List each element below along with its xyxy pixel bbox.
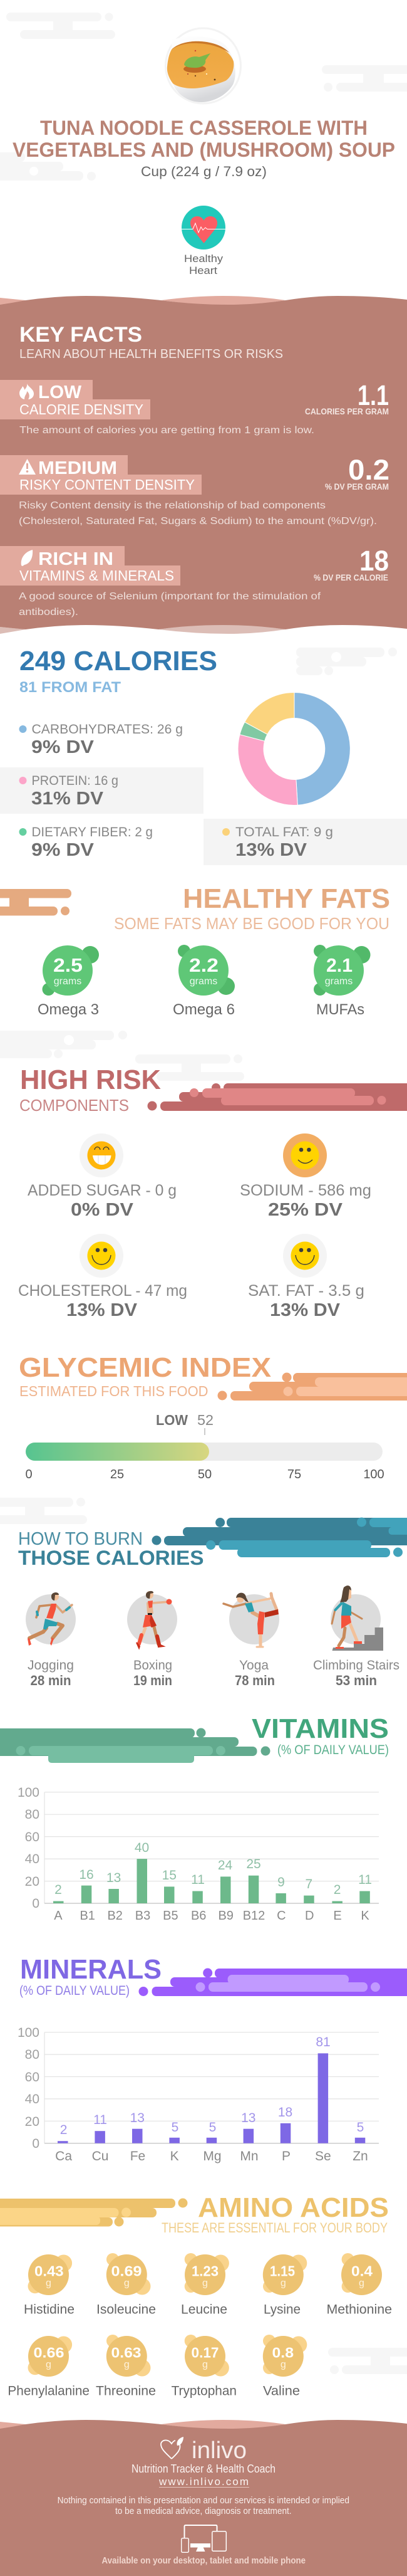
bar chart: vitamins: E	[333, 1909, 342, 1923]
subheading: percent of daily value: (% OF DAILY VALUE)	[277, 1743, 389, 1757]
logo: inlivo	[161, 2437, 247, 2464]
macro: carbohydrates: CARBOHYDRATES: 26 g	[31, 722, 183, 737]
background clouds: header	[0, 13, 407, 181]
activity: climbing stairs	[313, 1585, 399, 1688]
decoration: burn stripes	[152, 1517, 407, 1557]
disclaimer	[58, 2495, 349, 2516]
amino: phenylalanine: Phenylalanine	[8, 2384, 90, 2399]
activity: jogging: 28 min	[30, 1673, 71, 1688]
fact: medium risky content density: 0.2	[348, 454, 389, 486]
bar chart: minerals: 100	[18, 2026, 39, 2040]
bar chart: minerals: 0	[32, 2137, 39, 2151]
risk: saturated fat: 13% DV	[270, 1300, 341, 1320]
bar chart: vitamins: 11	[358, 1873, 372, 1887]
bar chart: minerals: 13	[241, 2111, 255, 2125]
fact: medium risky content density: MEDIUM	[38, 458, 117, 478]
fat: omega 6: grams	[190, 976, 217, 987]
fat: omega 3	[38, 945, 99, 1018]
bar chart: minerals: Mg	[203, 2149, 222, 2163]
serving size: Cup (224 g / 7.9 oz)	[141, 164, 267, 179]
decoration: minerals stripes	[139, 1969, 407, 1996]
heading: those calories: THOSE CALORIES	[18, 1547, 204, 1569]
bar chart: minerals: Fe	[130, 2149, 145, 2163]
amino: isoleucine: Isoleucine	[96, 2303, 156, 2317]
macro: total fat: TOTAL FAT: 9 g	[235, 825, 333, 839]
risk: added sugar: 0% DV	[71, 1200, 134, 1220]
amino: tryptophan	[172, 2335, 237, 2399]
amino: isoleucine: 0.69	[111, 2263, 142, 2279]
macro: dietary fiber: DIETARY FIBER: 2 g	[31, 825, 153, 839]
disclaimer: Nothing contained in this presentation and our services is intended or implied	[58, 2495, 349, 2506]
risk: cholesterol: 13% DV	[66, 1300, 138, 1320]
heading: glycemic index: GLYCEMIC INDEX	[19, 1352, 271, 1383]
fact: medium risky content density: RISKY CONTENT DENSITY	[19, 476, 195, 493]
gi scale	[25, 1468, 384, 1481]
availability note: Available on your desktop, tablet and mobile phone	[101, 2555, 306, 2566]
bar chart: vitamins: 11	[191, 1873, 205, 1887]
fact: rich in vitamins and minerals: antibodies).	[19, 607, 78, 618]
panel: glycemic index	[19, 1352, 407, 1481]
icon: devices	[182, 2525, 226, 2552]
bar chart: vitamins: 24	[218, 1858, 232, 1873]
macro: protein	[0, 767, 204, 814]
bar chart: minerals: 60	[25, 2070, 39, 2084]
activity: boxing	[127, 1591, 177, 1688]
panel: how to burn those calories	[18, 1517, 407, 1688]
macro: dietary fiber: 9% DV	[31, 840, 95, 860]
gi scale: 50	[198, 1468, 212, 1481]
heading: 249 calories: 249 CALORIES	[19, 646, 217, 676]
bar chart: vitamins: B12	[243, 1909, 265, 1923]
amino: leucine	[181, 2253, 229, 2317]
macro: dietary fiber	[19, 825, 153, 860]
panel: minerals	[18, 1954, 407, 2163]
bar chart: minerals: 13	[130, 2111, 145, 2125]
macro: total fat	[204, 819, 407, 865]
amino: histidine: 0.43	[34, 2263, 64, 2279]
bar chart: minerals: Cu	[92, 2149, 108, 2163]
gi value label: 52	[197, 1412, 214, 1428]
bar chart: minerals: 5	[357, 2120, 364, 2135]
bar chart: minerals: Ca	[55, 2149, 72, 2163]
amino: methionine: g	[359, 2278, 364, 2289]
risk: added sugar	[28, 1133, 177, 1220]
fat: omega 3: grams	[54, 976, 81, 987]
risk: added sugar: ADDED SUGAR - 0 g	[28, 1182, 177, 1199]
panel: high risk components	[18, 1065, 407, 1320]
risk: sodium: 25% DV	[268, 1200, 343, 1220]
bar chart: vitamins: 15	[162, 1868, 177, 1883]
macro: protein: PROTEIN: 16 g	[31, 774, 118, 788]
heading: high risk: HIGH RISK	[20, 1065, 161, 1095]
amino: isoleucine: g	[124, 2278, 130, 2289]
bar chart: minerals: K	[170, 2149, 179, 2163]
panel: key facts	[0, 296, 407, 634]
heading: amino acids: AMINO ACIDS	[198, 2192, 389, 2223]
activity: yoga: Yoga	[239, 1658, 269, 1673]
gi value label	[156, 1412, 214, 1435]
gi value label: LOW	[156, 1412, 188, 1428]
amino: leucine: g	[202, 2278, 208, 2289]
amino: valine: 0.8	[272, 2345, 294, 2361]
bar chart: vitamins: B9	[218, 1909, 234, 1923]
fat: mufas	[314, 945, 371, 1018]
amino: valine: g	[281, 2360, 286, 2370]
amino: lysine: g	[281, 2278, 286, 2289]
icon: soup bowl	[165, 28, 242, 104]
subheading: estimated: ESTIMATED FOR THIS FOOD	[19, 1383, 208, 1399]
macro: protein: 31% DV	[31, 789, 104, 809]
donut chart: macronutrients	[238, 692, 350, 805]
bar chart: vitamins: 40	[135, 1841, 149, 1855]
tagline: Nutrition Tracker & Health Coach	[131, 2463, 276, 2475]
disclaimer: to be a medical advice, diagnosis or treatment.	[115, 2506, 292, 2516]
amino: phenylalanine: g	[46, 2360, 51, 2370]
fact: low calorie density: CALORIE DENSITY	[19, 401, 143, 418]
amino: threonine: 0.63	[111, 2345, 142, 2361]
amino: leucine: Leucine	[181, 2303, 227, 2317]
bar chart: vitamins: B5	[163, 1909, 178, 1923]
risk: cholesterol: CHOLESTEROL - 47 mg	[18, 1282, 187, 1300]
decoration: healthy fats stripes	[0, 889, 71, 915]
amino: histidine: Histidine	[24, 2303, 75, 2317]
bar chart: minerals: 20	[25, 2115, 39, 2129]
background cloud: calories	[296, 648, 397, 675]
title: VEGETABLES AND (MUSHROOM) SOUP	[13, 139, 395, 161]
fat: omega 6: 2.2	[189, 954, 219, 976]
background cloud: amino acids	[328, 2348, 407, 2374]
amino: methionine: 0.4	[351, 2263, 373, 2279]
fact: low calorie density	[0, 379, 389, 436]
amino: tryptophan: Tryptophan	[172, 2384, 237, 2399]
amino: isoleucine	[96, 2253, 156, 2317]
amino: valine: Valine	[263, 2384, 300, 2399]
amino: lysine: 1.15	[270, 2263, 295, 2279]
risk: saturated fat: SAT. FAT - 3.5 g	[248, 1282, 364, 1300]
bar chart: vitamins: 2	[334, 1883, 341, 1897]
bar chart: vitamins: 7	[306, 1877, 312, 1891]
fact: rich in vitamins and minerals: RICH IN	[38, 549, 113, 569]
fact: low calorie density: The amount of calories you are getting from 1 gram is low.	[19, 425, 314, 436]
panel: footer	[0, 2420, 407, 2576]
heading: vitamins: VITAMINS	[252, 1713, 389, 1744]
amino: methionine: Methionine	[327, 2303, 392, 2317]
activity: jogging	[26, 1592, 76, 1688]
fact: medium risky content density: (Cholesterol, Saturated Fat, Sugars & Sodium) to the amount (%DV/gr).	[19, 516, 377, 527]
risk: saturated fat	[248, 1234, 364, 1320]
amino: threonine: Threonine	[96, 2384, 156, 2399]
amino: leucine: 1.23	[192, 2263, 219, 2279]
background clouds: high risk	[0, 1031, 244, 1081]
bar chart: vitamins: K	[361, 1909, 369, 1923]
fat: omega 3: Omega 3	[38, 1001, 99, 1018]
macro: carbohydrates	[19, 722, 183, 757]
heading: key facts: KEY FACTS	[19, 323, 142, 347]
title: TUNA NOODLE CASSEROLE WITH	[40, 117, 368, 139]
gi scale: 75	[287, 1468, 301, 1481]
bar chart: vitamins: 60	[25, 1830, 39, 1844]
amino: tryptophan: g	[202, 2360, 208, 2370]
activity: climbing stairs: Climbing Stairs	[313, 1658, 399, 1673]
fact: low calorie density: LOW	[38, 382, 82, 402]
icon: healthy heart	[182, 206, 225, 250]
decoration: glycemic stripes	[218, 1373, 407, 1401]
gi progress bar	[26, 1443, 383, 1461]
subheading: healthy fats: SOME FATS MAY BE GOOD FOR YOU	[114, 914, 389, 933]
bar chart: vitamins: B6	[191, 1909, 206, 1923]
fact: rich in vitamins and minerals: 18	[359, 545, 389, 577]
bar chart: minerals: 5	[172, 2120, 178, 2135]
amino: threonine: g	[124, 2360, 130, 2370]
fact: rich in vitamins and minerals: A good source of Selenium (important for the stimulation of	[19, 591, 321, 602]
heading: how to burn: HOW TO BURN	[18, 1529, 143, 1549]
bar chart: vitamins: 80	[25, 1807, 39, 1822]
activity: climbing stairs: 53 min	[336, 1673, 377, 1688]
bar chart: vitamins: 2	[54, 1883, 62, 1897]
fact: low calorie density: 1.1	[358, 379, 389, 411]
bar chart: minerals: 81	[316, 2035, 331, 2049]
fact: medium risky content density: % DV PER GRAM	[325, 481, 389, 492]
amino: methionine	[327, 2253, 392, 2317]
macro: carbohydrates: 9% DV	[31, 737, 95, 757]
heading: minerals: MINERALS	[20, 1954, 162, 1985]
amino: lysine	[263, 2254, 307, 2317]
fat: mufas: grams	[325, 976, 353, 987]
bar chart: vitamins: B1	[80, 1909, 95, 1923]
amino: histidine	[24, 2254, 75, 2317]
bar chart: minerals: Zn	[353, 2149, 368, 2163]
risk: sodium	[240, 1133, 371, 1220]
amino: phenylalanine: 0.66	[34, 2345, 64, 2361]
panel: vitamins	[0, 1713, 389, 1923]
activity: yoga	[224, 1593, 279, 1688]
healthy heart label	[184, 253, 224, 276]
bar chart: vitamins: B2	[107, 1909, 123, 1923]
bar chart: minerals: 2	[60, 2123, 67, 2137]
bar chart: vitamins: 25	[246, 1857, 261, 1871]
decoration: high risk stripes	[148, 1083, 407, 1111]
fat: omega 6	[173, 945, 235, 1018]
panel: calories	[0, 646, 407, 865]
bar chart: vitamins	[18, 1785, 379, 1923]
subheading: percent of daily value: (% OF DAILY VALUE)	[19, 1984, 130, 1998]
amino: threonine	[96, 2335, 156, 2399]
title	[13, 117, 395, 161]
bar chart: vitamins: 16	[79, 1868, 94, 1882]
amino: phenylalanine	[8, 2336, 90, 2399]
activity: yoga: 78 min	[235, 1673, 275, 1688]
fact: medium risky content density	[0, 454, 389, 527]
amino: valine	[263, 2335, 307, 2399]
risk: sodium: SODIUM - 586 mg	[240, 1182, 371, 1199]
bar chart: vitamins: 20	[25, 1874, 39, 1889]
fat: omega 6: Omega 6	[173, 1001, 235, 1018]
fat: omega 3: 2.5	[53, 954, 83, 976]
bar chart: minerals: 11	[93, 2113, 107, 2127]
gi scale: 100	[363, 1468, 384, 1481]
decoration: vitamins stripes	[0, 1728, 270, 1763]
bar chart: minerals: 5	[209, 2120, 216, 2135]
bar chart: minerals: Se	[315, 2149, 331, 2163]
gi scale: 25	[110, 1468, 124, 1481]
fact: rich in vitamins and minerals: % DV PER CALORIE	[314, 572, 388, 582]
bar chart: vitamins: 0	[32, 1896, 39, 1911]
bar chart: vitamins: 13	[106, 1871, 121, 1885]
bar chart: minerals: 18	[278, 2105, 292, 2120]
decoration: amino stripes	[0, 2198, 188, 2227]
fact: rich in vitamins and minerals: VITAMINS & MINERALS	[19, 567, 174, 584]
activity: boxing: 19 min	[133, 1673, 172, 1688]
bar chart: vitamins: 40	[25, 1852, 39, 1866]
heading: healthy fats: HEALTHY FATS	[183, 883, 390, 914]
amino: tryptophan: 0.17	[192, 2345, 219, 2361]
fat: mufas: 2.1	[326, 954, 353, 976]
bar chart: vitamins: A	[54, 1909, 63, 1923]
subheading: 81 from fat: 81 FROM FAT	[19, 679, 121, 696]
fat: mufas: MUFAs	[316, 1001, 364, 1018]
activity: jogging: Jogging	[28, 1658, 74, 1673]
activity: boxing: Boxing	[133, 1658, 172, 1673]
subheading: key facts: LEARN ABOUT HEALTH BENEFITS OR RISKS	[19, 347, 283, 361]
bar chart: minerals: P	[282, 2149, 291, 2163]
healthy heart label: Heart	[189, 265, 217, 276]
bar chart: vitamins: B3	[135, 1909, 150, 1923]
amino: histidine: g	[46, 2278, 51, 2289]
fact: rich in vitamins and minerals	[0, 545, 389, 618]
background cloud: burn	[0, 1498, 87, 1524]
fact: medium risky content density: Risky Content density is the relationship of bad components	[19, 500, 326, 511]
bar chart: vitamins: 9	[277, 1875, 285, 1890]
website link: www.inlivo.com	[158, 2476, 249, 2488]
macro: total fat: 13% DV	[235, 840, 307, 860]
gi scale: 0	[25, 1468, 33, 1481]
panel: amino acids	[0, 2192, 392, 2399]
bar chart: vitamins: 100	[18, 1785, 39, 1800]
bar chart: vitamins: C	[277, 1909, 286, 1923]
healthy heart label: Healthy	[184, 253, 224, 265]
bar chart: minerals: Mn	[240, 2149, 259, 2163]
fact: low calorie density: CALORIES PER GRAM	[305, 406, 389, 416]
amino: lysine: Lysine	[264, 2303, 301, 2317]
panel: healthy fats	[0, 883, 390, 1018]
risk: cholesterol	[18, 1234, 187, 1320]
bar chart: minerals	[18, 2026, 379, 2163]
bar chart: minerals: 80	[25, 2048, 39, 2062]
logo: inlivo: inlivo	[192, 2437, 247, 2464]
subheading: components: COMPONENTS	[19, 1096, 129, 1115]
bar chart: minerals: 40	[25, 2092, 39, 2106]
bar chart: vitamins: D	[305, 1909, 314, 1923]
